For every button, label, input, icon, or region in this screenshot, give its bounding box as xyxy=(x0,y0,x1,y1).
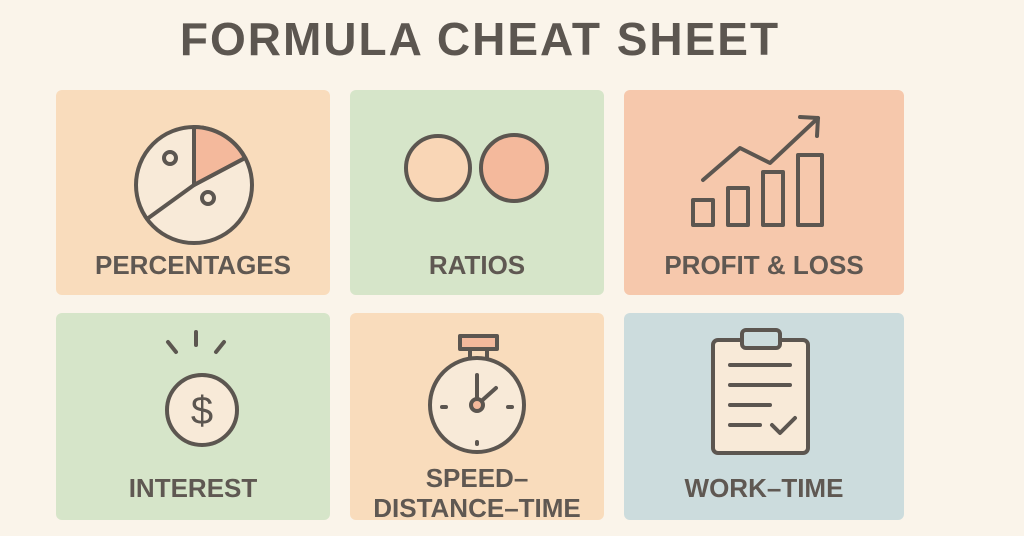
icon: ratio circles xyxy=(406,135,547,201)
title: FORMULA CHEAT SHEET xyxy=(180,13,780,65)
panel: work-time xyxy=(624,313,904,520)
panel: profit & loss xyxy=(624,90,904,295)
icon: dollar coin: $ xyxy=(191,389,213,433)
panel: speed-distance-time: DISTANCE–TIME xyxy=(373,493,581,523)
icon: pie chart xyxy=(136,127,252,243)
icon: stopwatch xyxy=(430,336,524,452)
icon: clipboard xyxy=(713,330,808,453)
panel: interest: INTEREST xyxy=(129,473,257,503)
panel: ratios: RATIOS xyxy=(429,250,525,280)
panel: speed-distance-time: SPEED– xyxy=(426,463,528,493)
panel: speed-distance-time xyxy=(350,313,604,520)
panel: percentages: PERCENTAGES xyxy=(95,250,291,280)
panel: profit & loss: PROFIT & LOSS xyxy=(664,250,864,280)
panel: work-time: WORK–TIME xyxy=(685,473,843,503)
icon: dollar coin xyxy=(167,332,237,445)
icon: growth chart xyxy=(693,117,822,225)
panel: percentages xyxy=(56,90,330,295)
panel: ratios xyxy=(350,90,604,295)
panel: interest xyxy=(56,313,330,520)
